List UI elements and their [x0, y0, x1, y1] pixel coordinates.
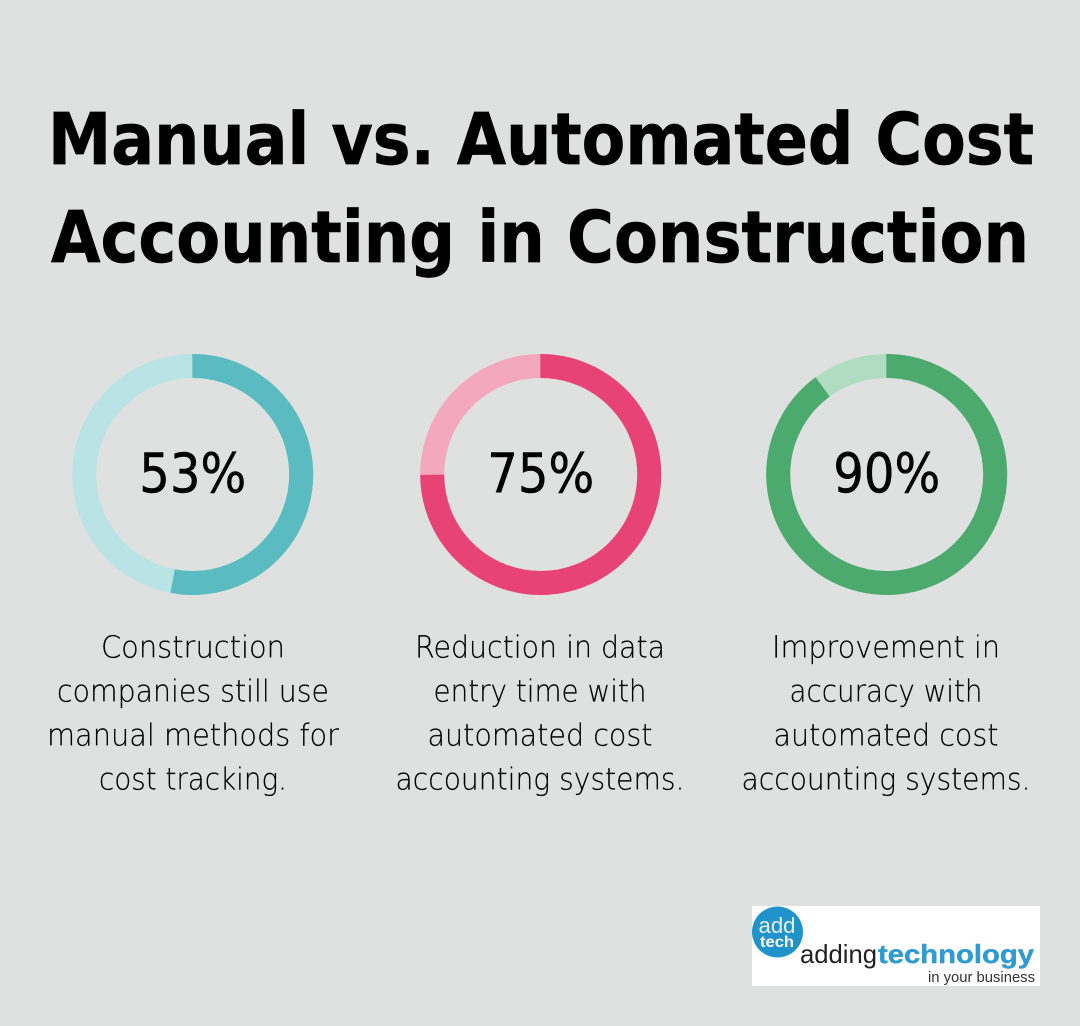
description: 53%: manual methods for: [47, 718, 340, 754]
description: 90%: accuracy with: [790, 674, 982, 710]
logo: adding technology: [752, 906, 1040, 986]
value: 75%: 75%: [487, 442, 594, 505]
description: 90%: accounting systems.: [742, 762, 1030, 798]
logo tagline: in your business: [928, 969, 1035, 986]
value: 53%: 53%: [139, 442, 246, 505]
donut chart: 53%: [84, 366, 301, 583]
description: 53%: cost tracking.: [99, 762, 287, 798]
panel: 90% stat: [742, 366, 1030, 798]
panel: 75% stat: [396, 366, 684, 798]
logo badge: [752, 906, 803, 958]
value: 90%: 90%: [833, 442, 940, 505]
description: 75%: [396, 630, 684, 798]
logo badge: tech: [760, 934, 794, 951]
description: 90%: automated cost: [774, 718, 998, 754]
description: 53%: companies still use: [57, 674, 329, 710]
logo badge: add: [758, 913, 796, 938]
logo wordmark: [800, 939, 1035, 969]
donut chart: 90%: [778, 366, 995, 583]
description: 53%: Construction: [101, 630, 285, 666]
description: 75%: accounting systems.: [396, 762, 684, 798]
description: 90%: [742, 630, 1030, 798]
title: [48, 98, 1034, 279]
logo wordmark: adding: [800, 939, 877, 969]
description: 75%: Reduction in data: [415, 630, 665, 666]
donut chart: 75%: [432, 366, 649, 583]
description: 90%: Improvement in: [772, 630, 1000, 666]
description: 53%: [47, 630, 340, 798]
panel: 53% stat: [47, 366, 340, 798]
description: 75%: entry time with: [434, 674, 646, 710]
description: 75%: automated cost: [428, 718, 652, 754]
logo wordmark: technology: [878, 939, 1035, 969]
